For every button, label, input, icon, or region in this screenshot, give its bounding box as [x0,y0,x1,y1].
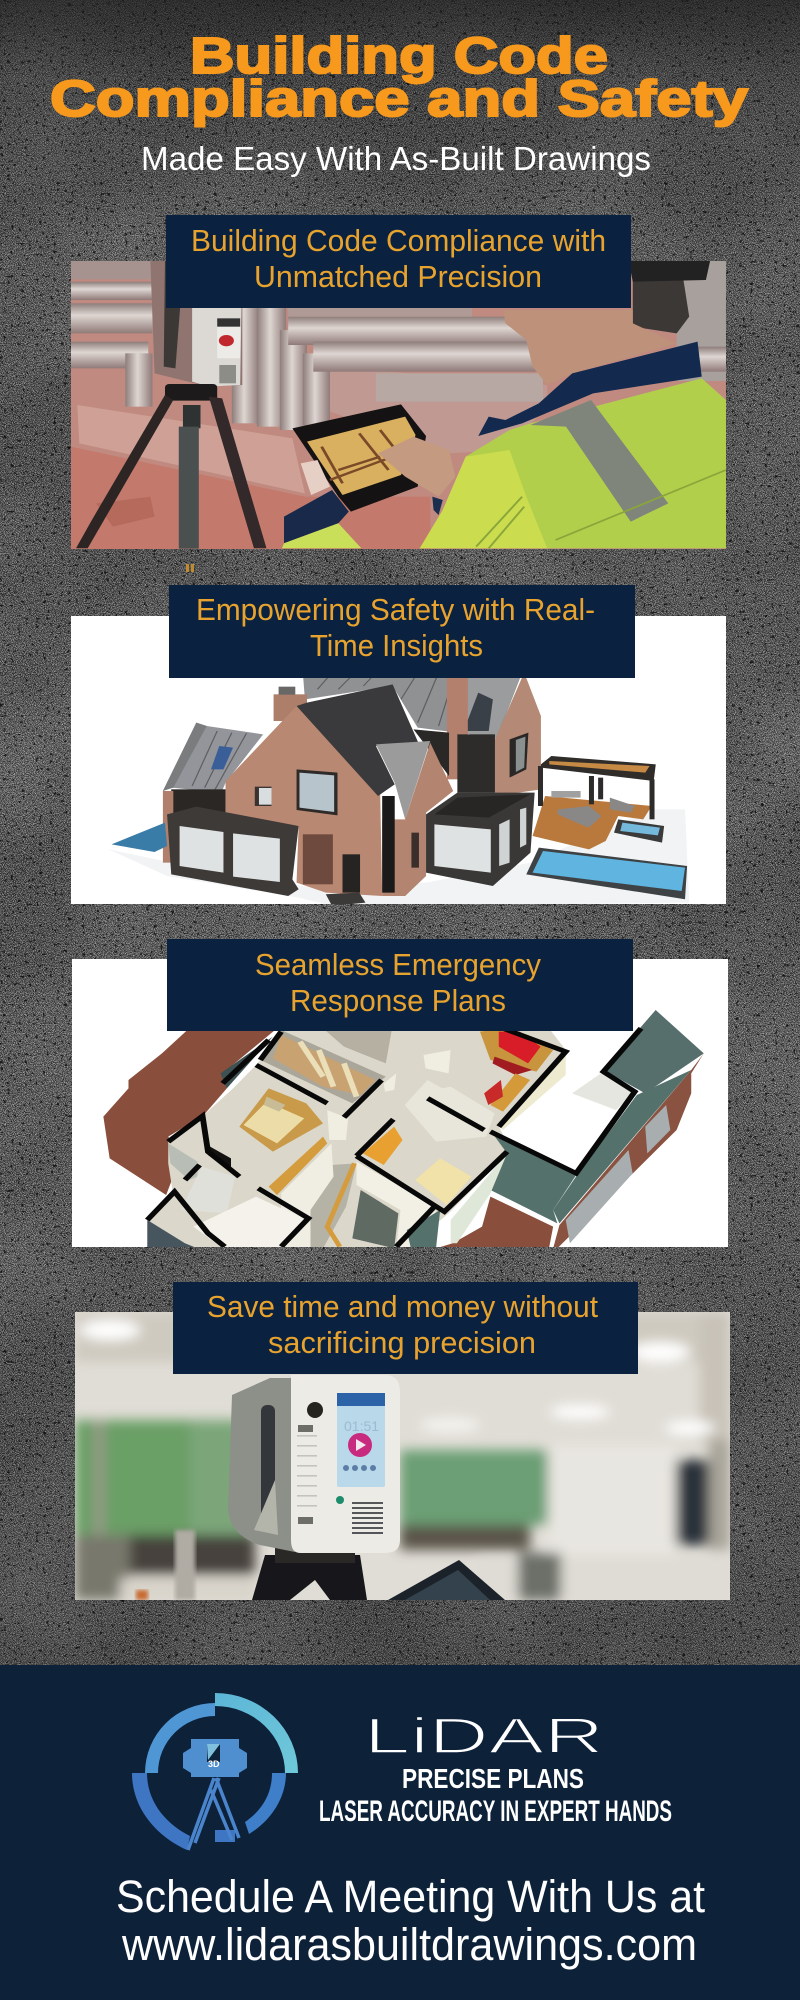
heading box 3 [167,939,633,1031]
scanner [228,1375,400,1553]
title: Compliance and Safety [50,70,749,127]
heading box 3: Seamless Emergency [255,947,541,982]
brand tagline: PRECISE PLANS [402,1763,584,1794]
heading box 2 [169,585,635,678]
call to action [116,1871,705,1970]
scanner: 01:51 [344,1418,379,1434]
bottom right arc [245,1773,286,1834]
lower room [357,1162,436,1248]
heading box 1: Building Code Compliance with [191,223,606,258]
roofs and brick [603,1010,704,1093]
bed [239,1088,323,1152]
left rooms [168,1143,198,1180]
right glazed box [426,793,535,886]
heading box 2: Empowering Safety with Real- [196,592,595,627]
bottom left arc [132,1773,190,1850]
footer band [0,1665,800,2000]
panel: laser scanner in office photo [75,1312,730,1600]
camera body [183,1739,247,1777]
heading box 4: Save time and money without [207,1289,598,1324]
black walls [147,1028,641,1247]
panel: photo of surveyor with laser scanner and tablet [71,261,726,549]
top left arc [145,1703,215,1773]
heading box 2: Time Insights [310,628,483,663]
heading box 1: Unmatched Precision [254,259,542,294]
title: Building Code [190,27,608,84]
heading box 3: Response Plans [290,983,506,1018]
partitions [405,1080,495,1142]
white room [499,1028,641,1167]
small stray mark [186,564,194,572]
call to action: Schedule A Meeting With Us at [116,1871,705,1922]
call to action: www.lidarasbuiltdrawings.com [121,1919,697,1970]
tablet [292,404,426,512]
heading box 4 [173,1282,638,1374]
lower left glazed box [167,807,299,896]
floor [147,1028,566,1248]
brand tagline [319,1763,672,1828]
brand name: LiDAR [364,1708,604,1764]
pools [614,819,664,843]
laser scanner on tripod [76,260,266,549]
hands and sleeve [282,437,455,548]
logo [132,1693,298,1850]
rear roof [303,673,522,738]
main gable [226,706,382,896]
subtitle: Made Easy With As-Built Drawings [141,140,651,177]
logo: 3D [208,1759,220,1769]
panel: 3D floor plan render [72,959,728,1247]
left wing [163,723,263,793]
terrace [103,1028,277,1195]
heading box 4: sacrificing precision [268,1325,536,1360]
deck and pergola [533,796,652,849]
bunk [480,1028,553,1072]
heading box 1 [166,215,631,308]
top right arc [215,1693,298,1773]
panel: 3D house render [71,616,726,904]
stairs [310,1163,357,1248]
title [50,27,749,127]
closet [260,1030,386,1103]
tripod [252,1547,367,1600]
tablet [388,1560,505,1600]
tripod [188,1778,239,1850]
worker [420,261,726,548]
